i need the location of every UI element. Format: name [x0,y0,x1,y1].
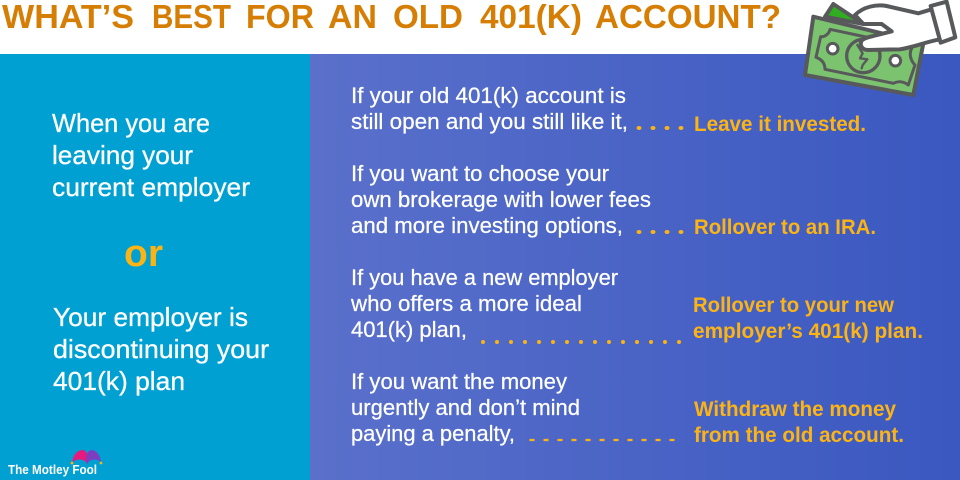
text block: scenario 3: who offers a more ideal [350,291,582,316]
answer 1: Leave it invested. [694,113,866,136]
text block: leaving employer: When you are [52,108,210,138]
icon part: bill holes [827,43,838,54]
text block: scenario 3: If you have a new employer [351,265,618,290]
text block: plan discontinued: Your employer is [53,302,248,332]
answer 4: Withdraw the money [694,398,896,421]
text block: plan discontinued [53,302,269,396]
text block: plan discontinued: discontinuing your [53,334,269,364]
icon part: hand [855,5,940,50]
text block: scenario 4: urgently and don’t mind [351,395,580,420]
text block: scenario 2: own brokerage with lower fees [351,187,651,212]
answer 4: from the old account. [694,424,904,447]
logo wordmark: The Motley Fool [8,463,97,477]
text block: scenario 4: If you want the money [351,369,567,394]
panel: right options panel [310,54,960,480]
text block: scenario 2 [351,161,651,238]
text block: scenario 2: If you want to choose your [351,161,609,186]
text block: leaving employer: leaving your [52,140,193,170]
icon part: front bill [805,17,923,95]
text: or: or [124,233,163,275]
text block: scenario 3: 401(k) plan, [351,317,467,342]
text block: scenario 4 [351,369,580,446]
text block: scenario 1: If your old 401(k) account is [351,83,626,108]
text block: scenario 1 [351,83,628,134]
answer 3: employer’s 401(k) plan. [693,320,923,343]
icon part: bill inner border [816,29,915,85]
dotted connector 1 [636,126,684,130]
text block: scenario 3 [350,265,618,342]
text block: scenario 2: and more investing options, [351,213,623,238]
answer 2: Rollover to an IRA. [694,216,876,239]
logo jester hat [71,450,102,464]
dotted connector 2 [636,230,684,234]
text block: leaving employer: current employer [52,172,250,202]
title [2,0,781,35]
icon part: dollar sign [857,45,867,68]
icon part: center coin [847,39,880,73]
dotted connector 3 [483,340,680,344]
panel: left condition panel [0,54,310,480]
text block: plan discontinued: 401(k) plan [53,366,185,396]
dashed connector 4 [530,439,675,441]
text block: leaving employer [52,108,250,202]
icon: hand holding money [805,2,955,95]
logo: The Motley Fool [8,450,102,477]
answer 4 [694,398,904,447]
icon part: back bill [825,4,863,24]
answer 3 [693,294,923,343]
text block: scenario 4: paying a penalty, [351,421,515,446]
text block: scenario 1: still open and you still like it, [351,109,628,134]
icon part: cuff [931,2,955,43]
answer 3: Rollover to your new [693,294,895,317]
